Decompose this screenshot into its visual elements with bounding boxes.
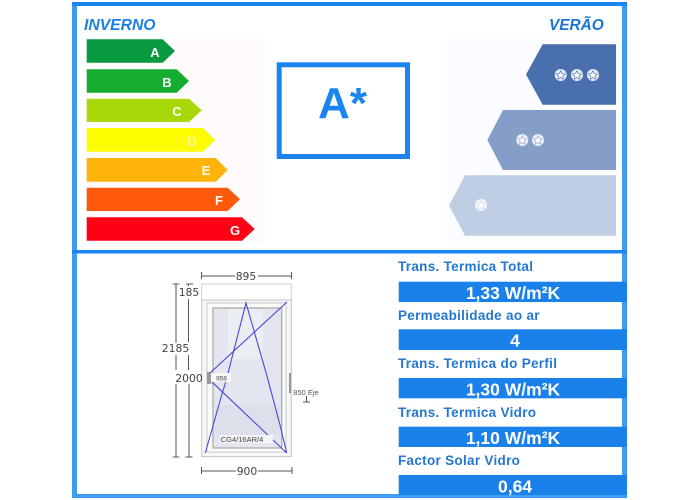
dimension: 850 Eje [293, 388, 319, 402]
dimension: height 2185 [162, 284, 189, 457]
bar G [87, 217, 255, 241]
dimension: height 185: 185 [179, 286, 199, 299]
panel: energy ratings [84, 16, 616, 243]
bar F [87, 188, 240, 211]
bar A [87, 39, 175, 63]
spec: Trans. Termica Total [398, 259, 627, 303]
spec: Trans. Termica do Perfil: Trans. Termica do Perfil [398, 356, 557, 371]
winter energy scale [87, 39, 255, 241]
rating box: A* [279, 65, 408, 156]
rating box: A*: A* [318, 79, 368, 128]
spec: Trans. Termica do Perfil: 1,30 W/m²K [466, 380, 561, 400]
dimension: height 2185: 2185 [162, 342, 189, 355]
summer bar: three stars [526, 44, 616, 105]
dimension: height 185 [179, 284, 199, 370]
bar C: C [172, 104, 182, 119]
dimension: top width 895: 895 [236, 270, 256, 283]
summer bar: two stars [487, 110, 616, 170]
dimension: handle 958: 958 [216, 376, 227, 382]
bar F: F [215, 193, 223, 208]
spec: Trans. Termica Vidro: Trans. Termica Vidro [398, 405, 536, 420]
bar D [87, 128, 215, 152]
bar B: B [162, 75, 172, 90]
spec: Factor Solar Vidro: Factor Solar Vidro [398, 453, 520, 468]
panel: thermal specs [398, 259, 627, 496]
bar E: E [202, 163, 211, 178]
spec: Permeabilidade ao ar [398, 308, 627, 351]
bar D: D [187, 134, 197, 149]
spec: Permeabilidade ao ar: Permeabilidade ao ar [398, 308, 540, 323]
bar G: G [230, 223, 240, 238]
dimension: handle 958 [212, 373, 231, 382]
spec: Trans. Termica Vidro: 1,10 W/m²K [466, 428, 561, 448]
window drawing [202, 284, 291, 457]
bar E [87, 158, 228, 182]
spec: Trans. Termica Total: Trans. Termica Total [398, 259, 533, 274]
spec: Trans. Termica Total: 1,33 W/m²K [466, 283, 561, 303]
dimension: 850 Eje: 850 Eje [293, 388, 319, 397]
bar B [87, 69, 189, 93]
outer frame [72, 2, 627, 498]
dimension: bottom width 900: 900 [237, 465, 257, 478]
summer scale [449, 44, 616, 236]
panel: window diagram [162, 270, 319, 478]
spec: Trans. Termica Vidro [398, 405, 627, 448]
glass label: CG4/16AR/4 [221, 435, 263, 444]
spec: Permeabilidade ao ar: 4 [510, 331, 520, 351]
bar A: A [150, 45, 160, 60]
dimension: top width 895 [202, 270, 292, 283]
summer bar: one star [449, 175, 616, 236]
spec: Trans. Termica do Perfil [398, 356, 627, 400]
dimension: height 2000: 2000 [175, 372, 203, 385]
spec: Factor Solar Vidro: 0,64 [498, 476, 532, 496]
dimension: bottom width 900 [202, 465, 292, 478]
heading: INVERNO: INVERNO [84, 17, 155, 34]
dimension: height 2000 [175, 372, 203, 457]
heading: VERÃO: VERÃO [549, 16, 604, 34]
opening lines [205, 302, 287, 453]
bar C [87, 99, 202, 122]
spec: Factor Solar Vidro [398, 453, 627, 496]
